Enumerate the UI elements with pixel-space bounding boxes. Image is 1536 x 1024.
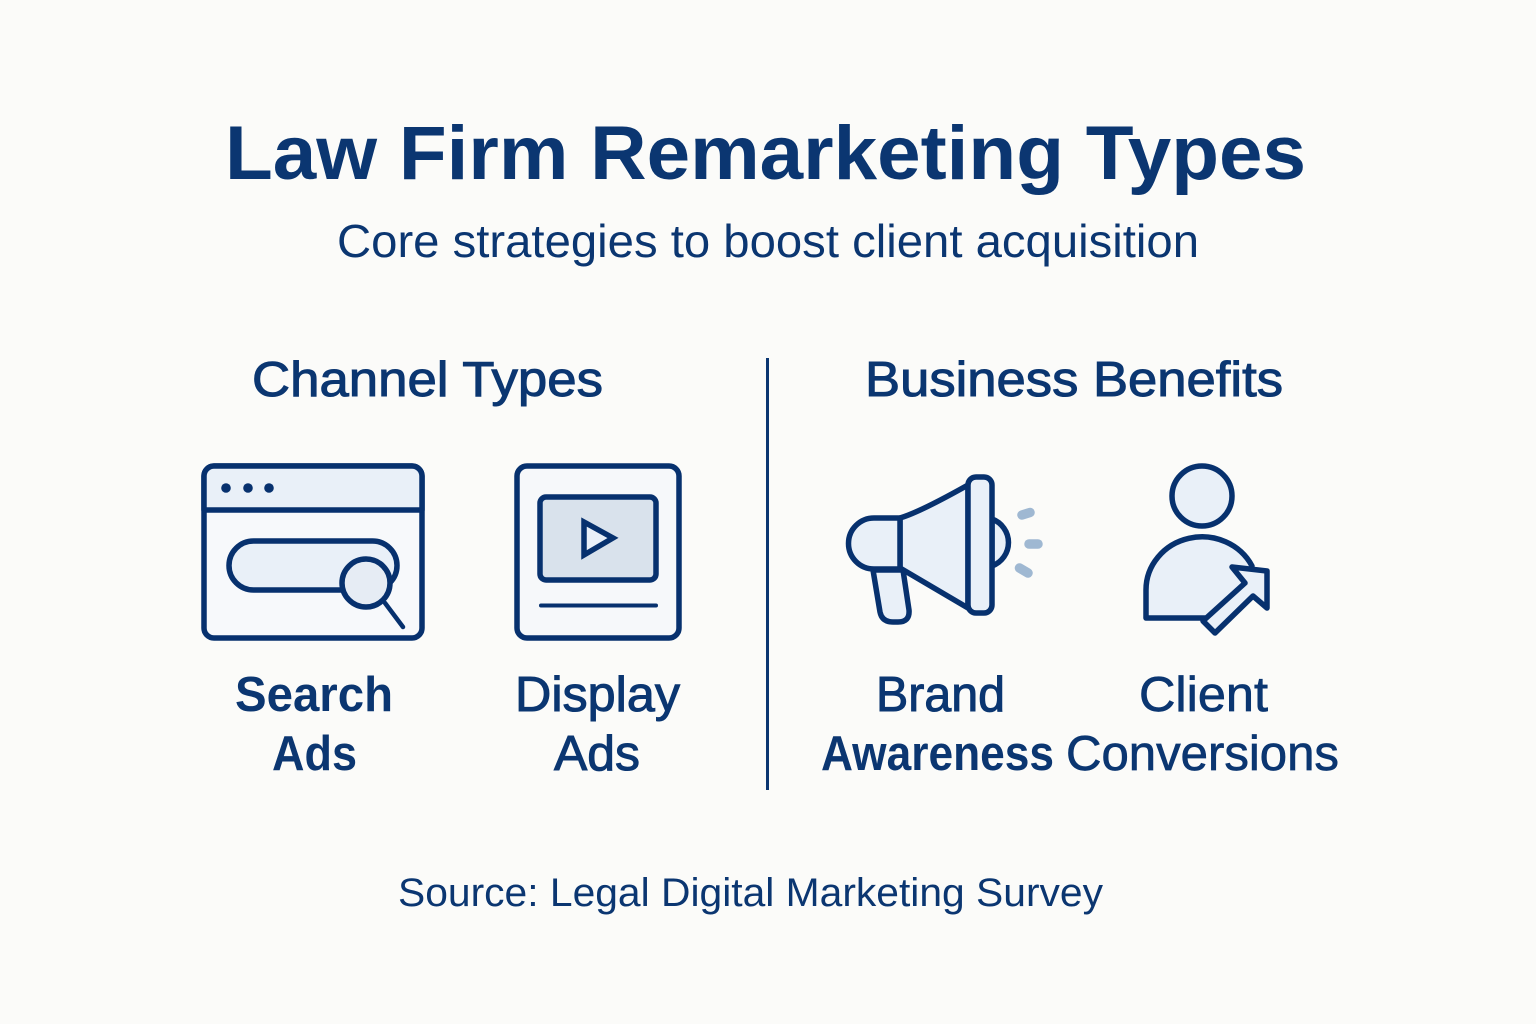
label: display ads: Display (515, 668, 681, 722)
divider (766, 358, 769, 790)
panel: business benefits (821, 353, 1339, 781)
label: search ads: Ads (272, 727, 357, 781)
sound lines (1020, 512, 1038, 573)
subtitle: Core strategies to boost client acquisition (337, 215, 1199, 267)
heading: business benefits: Business Benefits (865, 353, 1283, 407)
icon: person with arrow (1146, 466, 1267, 633)
icon: display ads screen (517, 466, 679, 638)
heading: channel types: Channel Types (252, 353, 603, 407)
label: client conversions: Client (1139, 668, 1268, 722)
title: Law Firm Remarketing Types (225, 111, 1306, 196)
label: brand awareness: Awareness (821, 727, 1054, 781)
label: client conversions: Conversions (1066, 727, 1339, 781)
source note: Source: Legal Digital Marketing Survey (398, 871, 1103, 915)
panel: channel types (204, 353, 681, 781)
label: search ads: Search (235, 668, 393, 722)
label: display ads: Ads (554, 727, 640, 781)
label: brand awareness: Brand (876, 668, 1005, 722)
icon: search ads browser (204, 466, 422, 638)
icon: megaphone (848, 477, 1038, 622)
